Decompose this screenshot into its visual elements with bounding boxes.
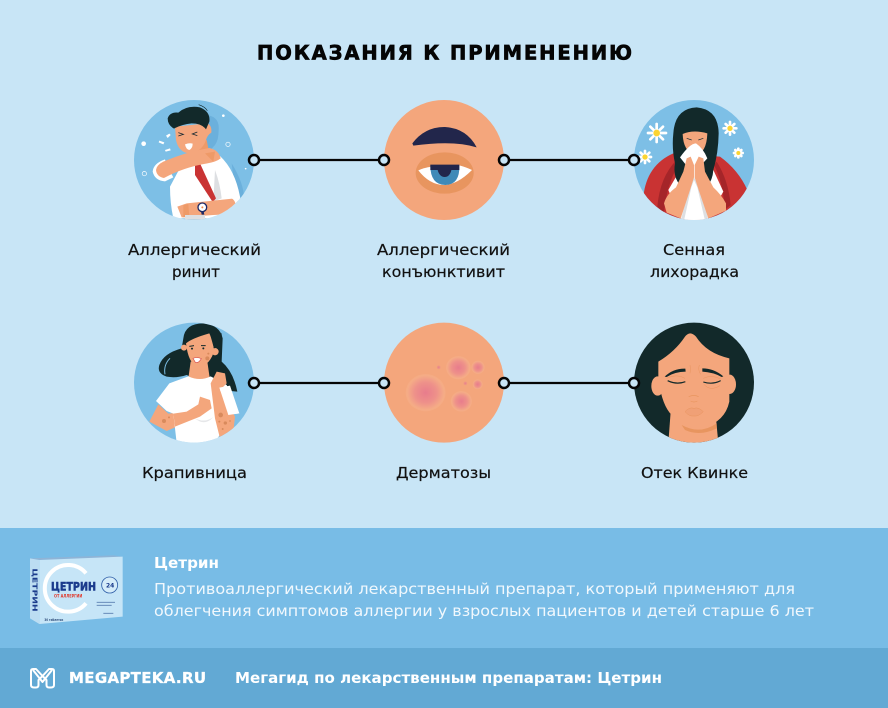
right arm — [211, 372, 235, 438]
panel: product description — [0, 528, 888, 648]
shirt — [156, 376, 239, 443]
right arm and hand — [695, 157, 726, 218]
label: hay fever: Сенная — [663, 241, 725, 259]
lower arm — [177, 198, 240, 217]
red jacket — [643, 153, 747, 221]
forearm skin on torso — [173, 397, 212, 427]
label: allergic conjunctivitis: конъюнктивит — [382, 263, 505, 281]
ears — [651, 376, 662, 396]
label: allergic conjunctivitis — [377, 241, 510, 281]
icon: Megapteka logo — [31, 669, 54, 688]
hair — [673, 107, 719, 186]
left arm — [149, 404, 175, 431]
eyebrow — [412, 127, 477, 147]
neck — [668, 412, 718, 443]
brows — [665, 369, 686, 377]
label: allergic rhinitis: Аллергический — [128, 241, 261, 259]
face — [658, 333, 729, 428]
face — [186, 333, 214, 367]
label: hay fever — [650, 241, 739, 281]
label: allergic rhinitis — [128, 241, 261, 281]
raised arm — [156, 148, 221, 178]
footer link text: Мегагид по лекарственным препаратам: Цетрин — [235, 669, 662, 687]
label: dermatoses: Дерматозы — [396, 464, 491, 482]
label: allergic rhinitis: ринит — [172, 263, 220, 281]
footer — [0, 648, 888, 708]
center shirt gap — [681, 177, 709, 221]
neck — [188, 362, 210, 379]
eyes — [668, 381, 685, 383]
product description text: облегчения симптомов аллергии у взрослых пациентов и детей старше 6 лет — [154, 602, 814, 620]
icon: man sneezing into elbow — [133, 99, 255, 221]
shirt — [668, 170, 723, 221]
connector row 1 — [254, 159, 634, 161]
icon: face with angioedema — [633, 322, 755, 443]
tie — [195, 163, 216, 202]
connector nodes — [249, 155, 639, 388]
face — [178, 132, 197, 136]
hair — [159, 323, 237, 392]
connector row 2 — [254, 382, 634, 384]
product description text: Противоаллергический лекарственный препарат, который применяют для — [154, 580, 795, 598]
raised arm cuff — [153, 159, 173, 181]
nose — [689, 395, 699, 402]
icon: Cetrin package: ОТ АЛЛЕРГИИ — [54, 594, 83, 600]
neck and head — [198, 140, 208, 150]
icon: dermatosis skin spots — [384, 323, 504, 443]
lips — [685, 408, 703, 416]
icon: Cetrin package: ЦЕТРИН — [51, 580, 96, 594]
shirt — [170, 156, 242, 218]
product name: Цетрин — [154, 554, 219, 572]
icon: woman with hay fever — [633, 99, 755, 221]
icon: Cetrin package: 24 — [106, 582, 114, 589]
brand name: MEGAPTEKA.RU — [69, 669, 206, 687]
label: Quincke edema: Отек Квинке — [641, 464, 748, 482]
watch — [198, 203, 207, 212]
hair — [168, 107, 209, 129]
right sleeve — [219, 386, 239, 415]
icon: Cetrin package — [30, 555, 123, 624]
label: allergic conjunctivitis: Аллергический — [377, 241, 510, 259]
icon: woman with hives — [133, 322, 255, 443]
daisies — [639, 122, 743, 163]
product description text — [154, 580, 814, 620]
icon: Cetrin package: 30 таблеток — [44, 618, 64, 622]
eye white — [418, 165, 472, 185]
label: hay fever: лихорадка — [650, 263, 739, 281]
face — [682, 132, 708, 150]
label: urticaria: Крапивница — [142, 464, 247, 482]
icon: Cetrin package: ЦЕТРИН — [31, 568, 39, 612]
left arm and hand — [664, 157, 694, 218]
tissue — [680, 143, 707, 170]
title: ПОКАЗАНИЯ К ПРИМЕНЕНИЮ — [257, 42, 632, 64]
icon: eye with conjunctivitis — [384, 100, 504, 220]
